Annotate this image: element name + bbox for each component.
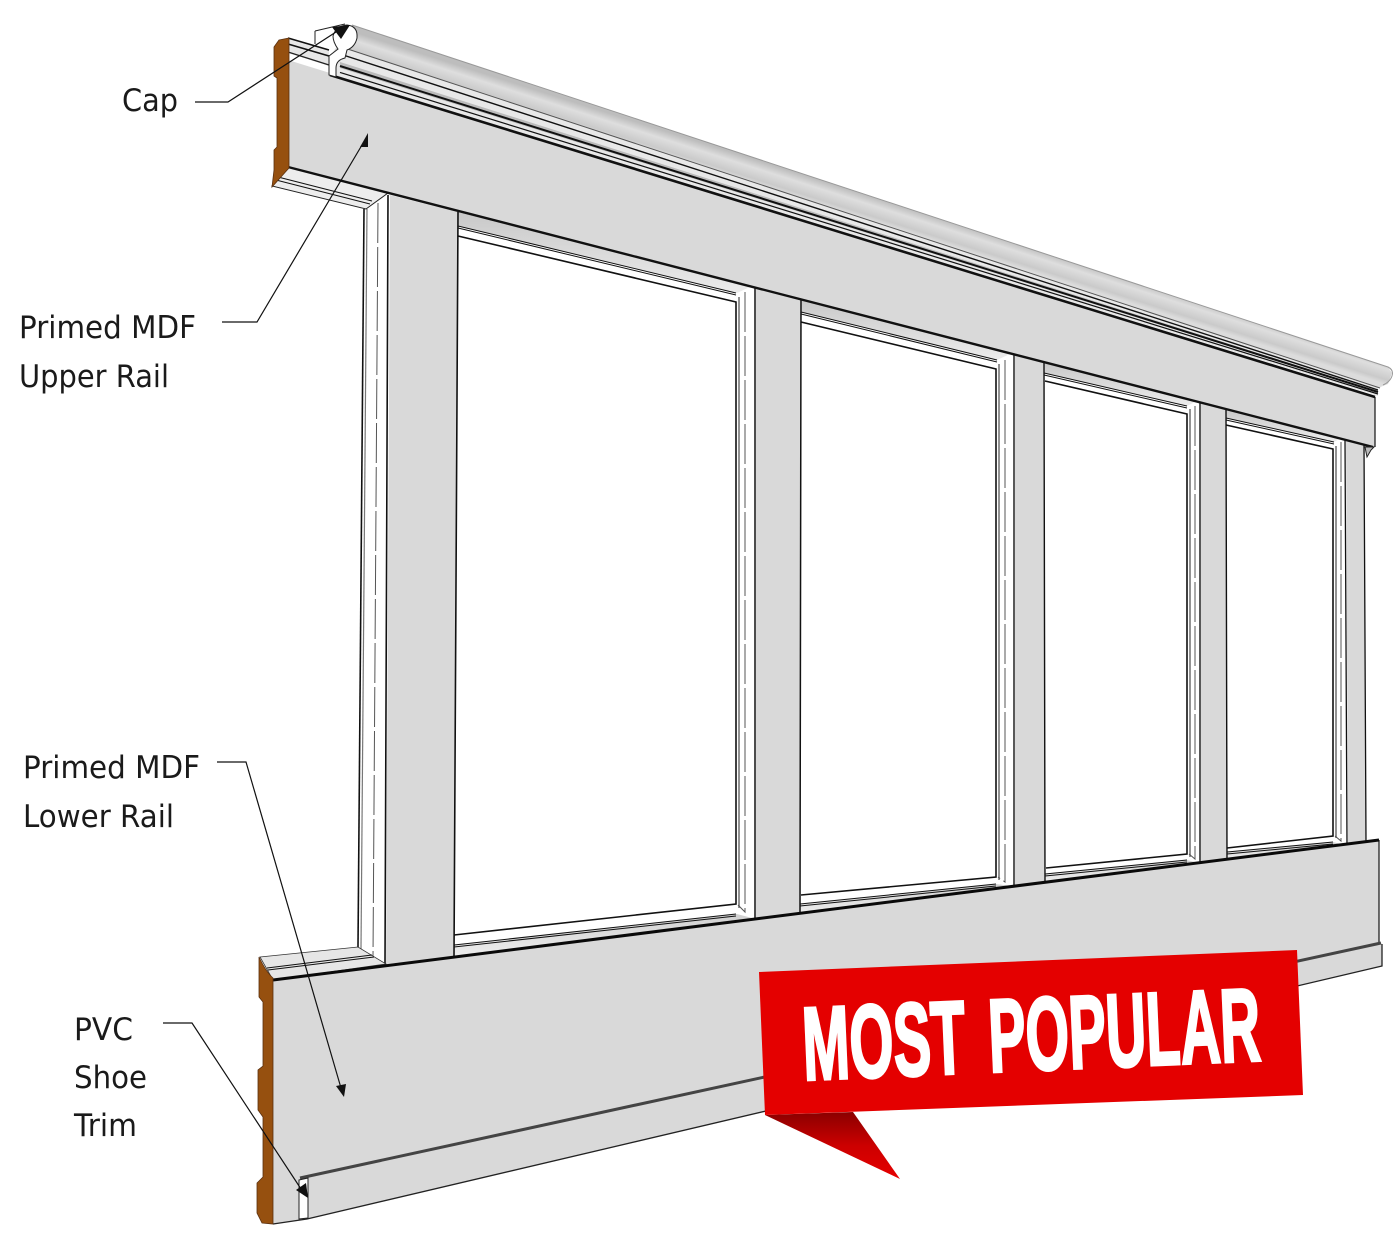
callout: most popular banner: MOST: [800, 980, 968, 1103]
label: PVC Shoe Trim: Shoe: [74, 1060, 147, 1096]
label: Primed MDF Upper Rail: Upper Rail: [19, 359, 169, 395]
panel: primed MDF upper rail: [288, 60, 1375, 447]
label: Cap: [122, 25, 350, 119]
arrow: shoe trim: [296, 1183, 308, 1198]
icon: shoe trim end: [299, 1178, 308, 1219]
arrow: lower rail: [336, 1084, 346, 1097]
panel: window one: [454, 212, 755, 957]
panel: cap moulding: [288, 24, 1392, 447]
label: Cap: Cap: [122, 83, 178, 119]
arrow: cap: [332, 25, 350, 39]
panel: upper rail ledge: [272, 167, 388, 209]
panel: right return: [1365, 447, 1374, 457]
icon: upper rail end grain: [272, 38, 289, 187]
panel: cap bead: [333, 25, 1392, 388]
arrow: upper rail: [360, 133, 368, 147]
panel: lower rail ledge: [260, 947, 386, 980]
label: PVC Shoe Trim: Trim: [73, 1108, 137, 1144]
panel: vertical stiles: [385, 195, 1366, 964]
panel: window three: [1044, 363, 1200, 882]
panel: primed MDF lower rail and PVC shoe: [273, 840, 1382, 1224]
panel: left return moulding: [358, 195, 388, 964]
label: Primed MDF Upper Rail: Primed MDF: [19, 310, 196, 346]
label: PVC Shoe Trim: [73, 1012, 308, 1198]
icon: lower rail end grain: [257, 957, 273, 1224]
label: Primed MDF Upper Rail: [19, 133, 368, 395]
callout: most popular banner: [759, 950, 1303, 1179]
label: Primed MDF Lower Rail: Primed MDF: [23, 750, 200, 786]
panel: window four: [1226, 409, 1347, 860]
panel: window openings and mouldings: [358, 195, 1347, 964]
panel: rail bottom line: [288, 167, 1373, 447]
panel: window two: [800, 300, 1014, 913]
label: Primed MDF Lower Rail: Lower Rail: [23, 799, 174, 835]
icon: cap profile end: [329, 25, 357, 77]
label: PVC Shoe Trim: PVC: [74, 1012, 133, 1048]
label: Primed MDF Lower Rail: [23, 750, 346, 1097]
